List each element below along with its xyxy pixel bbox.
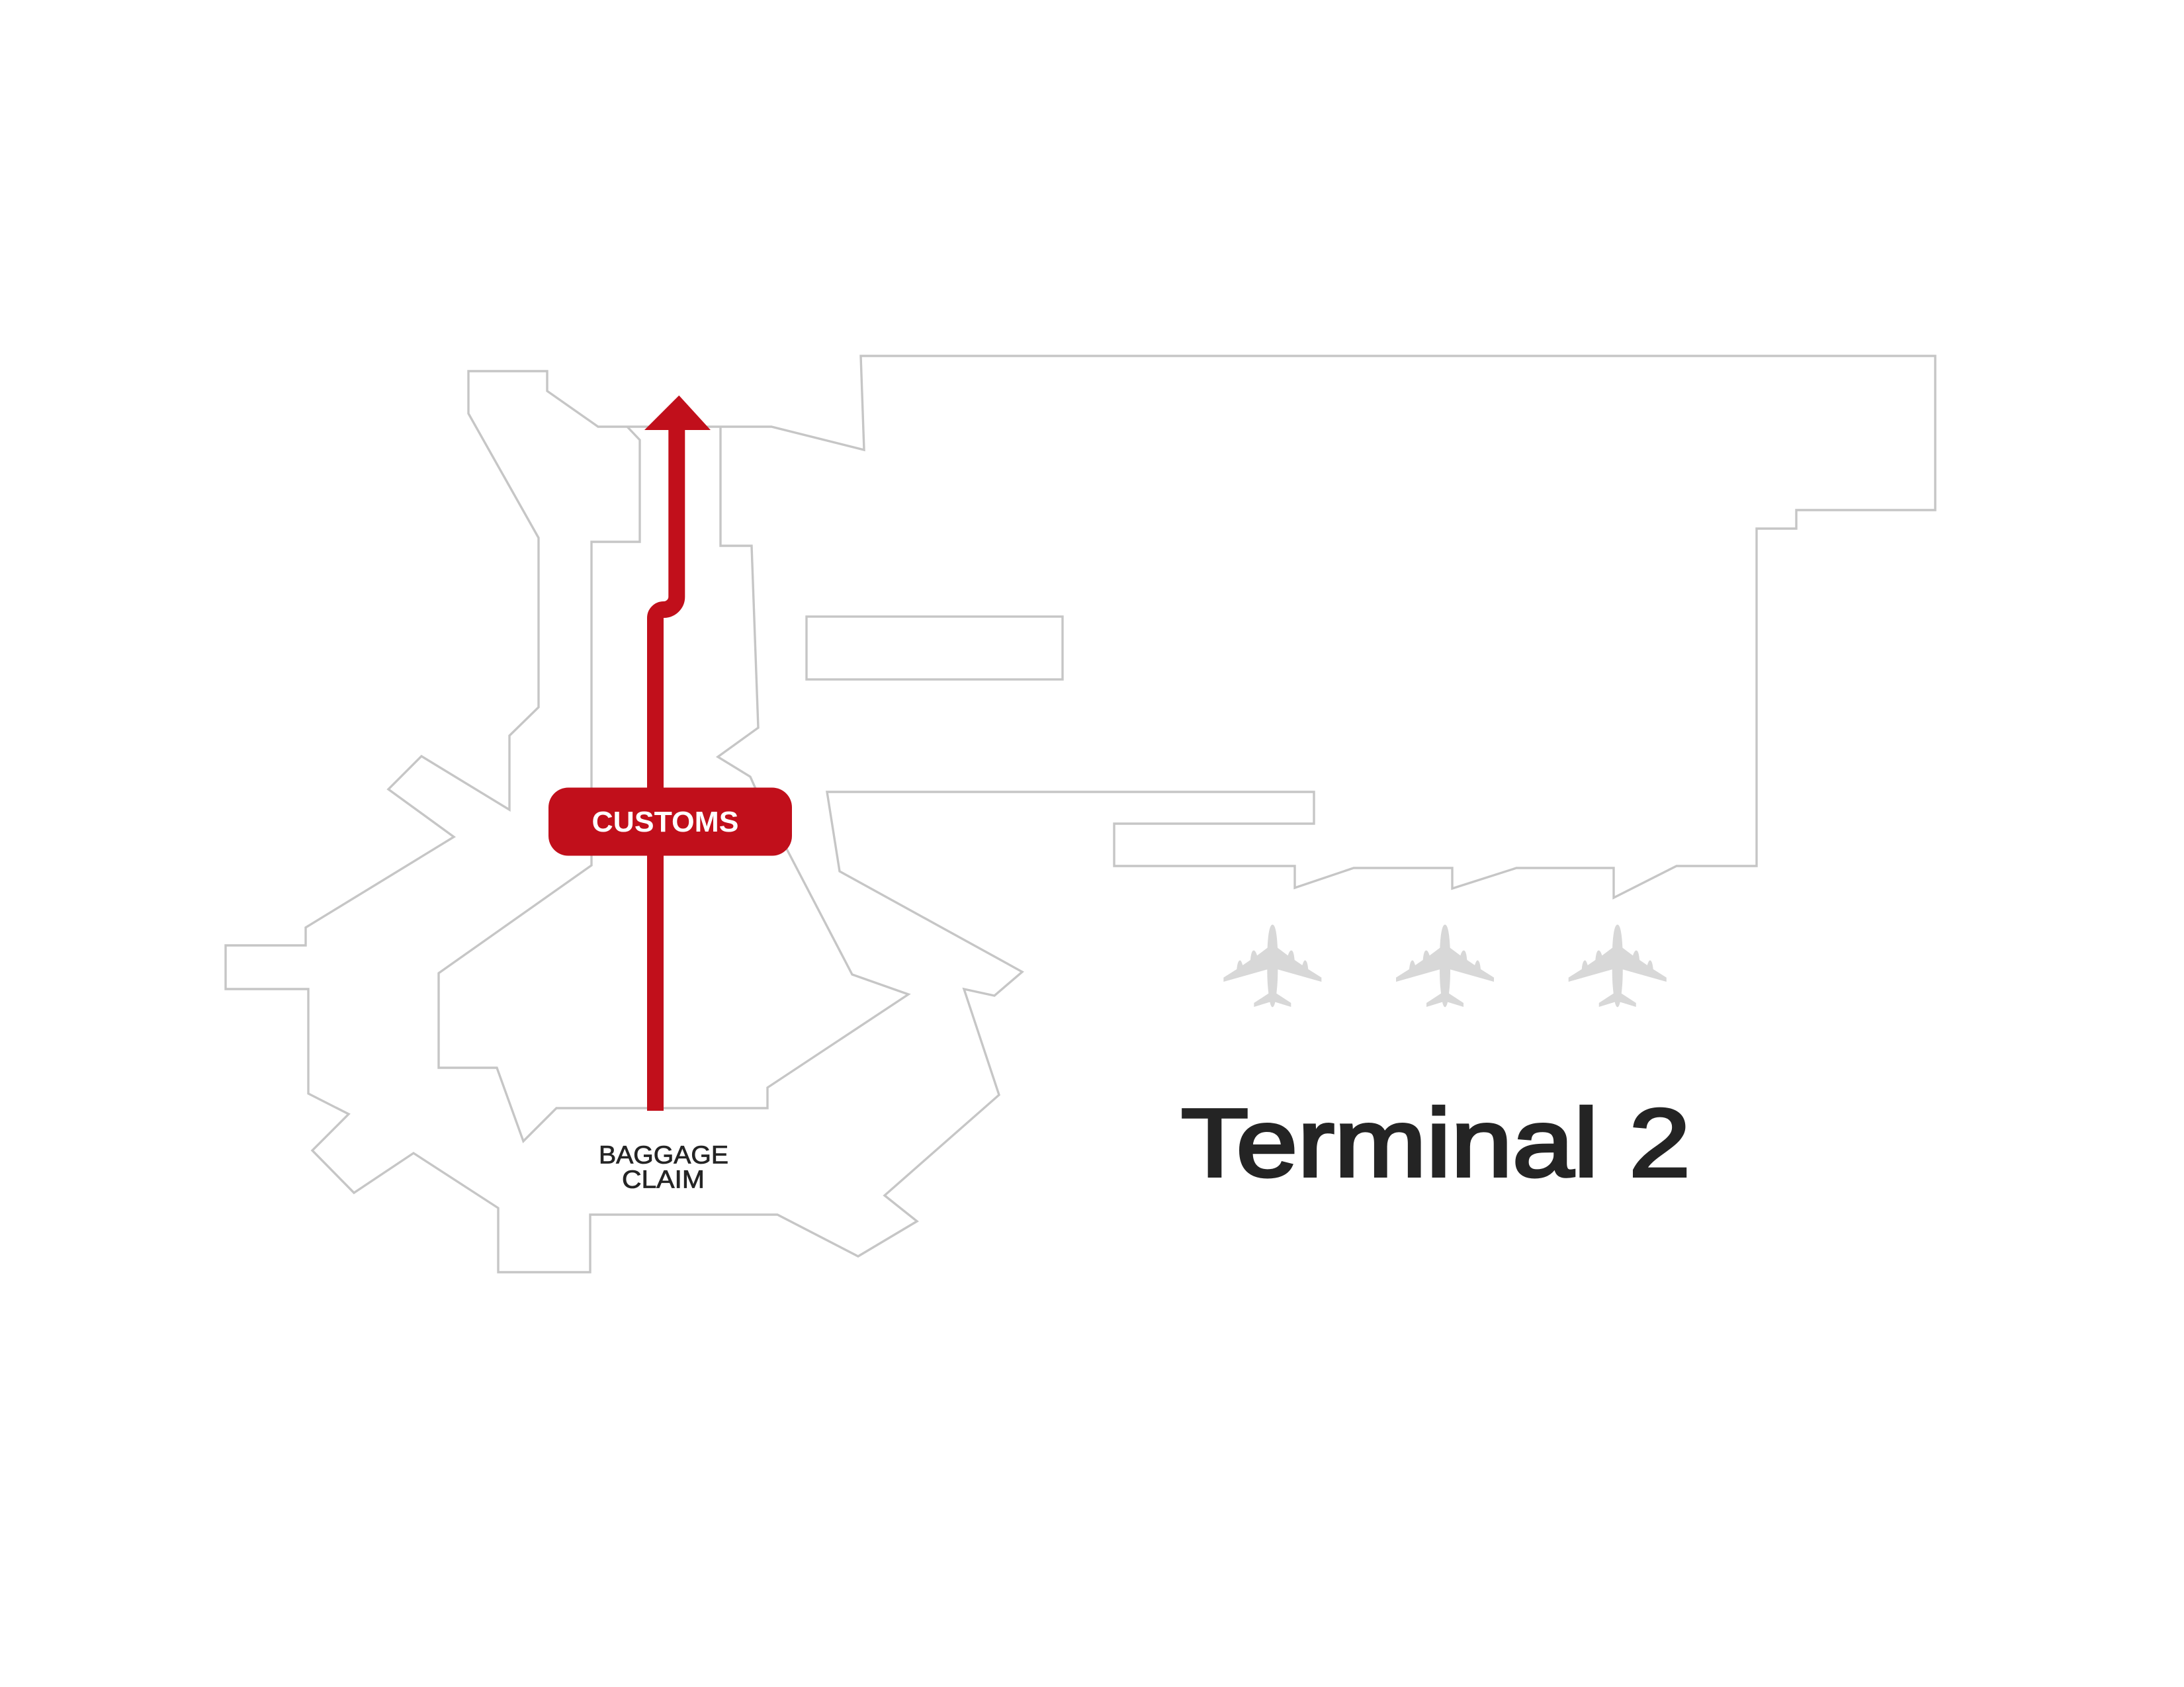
customs badge background — [548, 787, 792, 856]
customs badge — [548, 787, 792, 856]
route line — [655, 427, 677, 1111]
baggage claim label: CLAIM — [622, 1166, 705, 1193]
floor plan outline — [226, 356, 1935, 1272]
arrow head — [644, 396, 711, 430]
icon: plane 1 — [1223, 925, 1321, 1007]
central rectangle outline — [807, 617, 1063, 679]
outer terminal outline — [226, 356, 1935, 1272]
customs label: CUSTOMS — [591, 806, 738, 838]
icon: plane 2 — [1396, 925, 1494, 1007]
title: Terminal 2: Terminal 2 — [1181, 1089, 1690, 1197]
red route arrow — [644, 396, 711, 1111]
baggage claim label: BAGGAGE — [599, 1142, 728, 1170]
baggage claim label — [599, 1142, 728, 1193]
inner corridor outline — [439, 427, 908, 1141]
icon: plane 3 — [1569, 925, 1667, 1007]
